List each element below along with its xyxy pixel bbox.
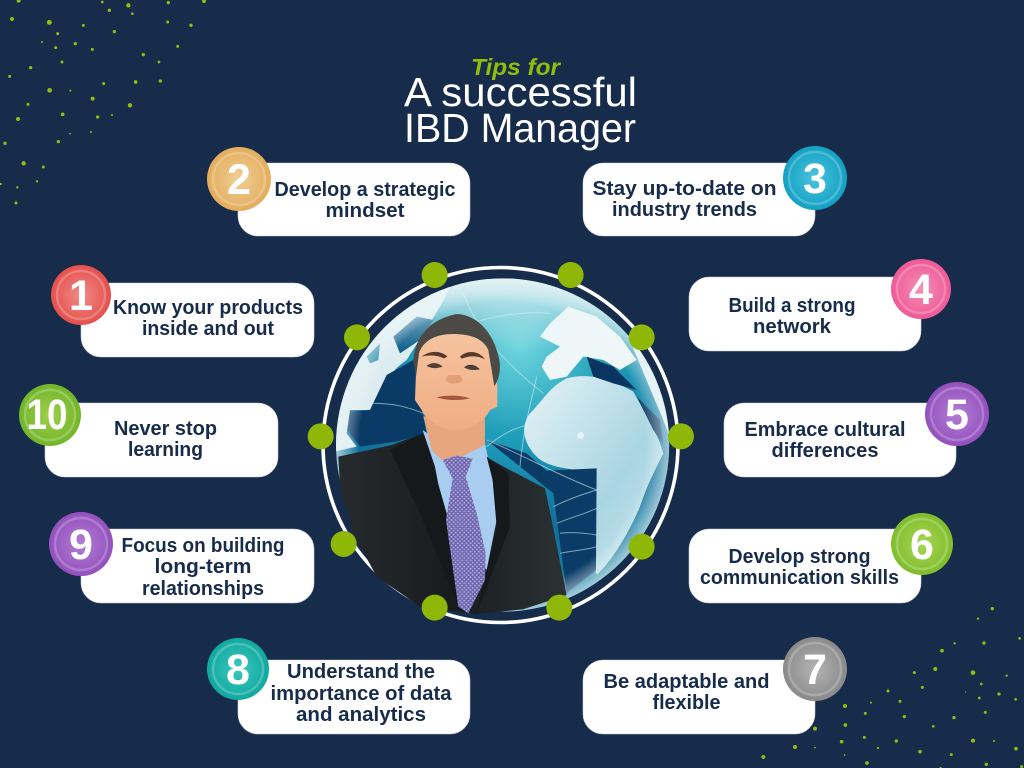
tip 4: 4 (909, 266, 933, 314)
outer ring (323, 268, 678, 622)
tip 5: Embrace cultural (744, 418, 906, 441)
tip 7: 7 (803, 646, 827, 694)
tip 6 (689, 513, 953, 603)
tip 9: 9 (69, 521, 93, 569)
tip 4: Build a strong (728, 294, 856, 317)
tip 1: 1 (69, 272, 93, 320)
title line 1: A successful (404, 69, 637, 115)
title line 2: IBD Manager (404, 105, 636, 151)
tip 8: importance of data (270, 682, 452, 705)
brows (422, 352, 485, 359)
tip 2: mindset (326, 199, 405, 222)
tip 10: Never stop (114, 417, 217, 440)
tip 10: 10 (26, 391, 68, 439)
tip 7: Be adaptable and (604, 670, 770, 693)
tip 1: inside and out (142, 317, 274, 340)
suit (338, 433, 567, 614)
decorative dots: bottom right (761, 607, 1023, 768)
tip 4 (689, 259, 951, 351)
tip 9: long-term (154, 555, 252, 578)
tie (443, 456, 486, 613)
tip 6: communication skills (700, 566, 899, 589)
head (415, 331, 497, 430)
subtitle: Tips for: Tips for (471, 54, 561, 80)
man portrait (338, 314, 567, 614)
tip 3 (583, 146, 847, 236)
tip 7 (583, 637, 847, 734)
tip 8: 8 (226, 646, 250, 694)
tip 10 (19, 384, 278, 477)
green node dots (308, 262, 694, 621)
tip 8: and analytics (296, 703, 426, 726)
tip 8 (207, 638, 470, 734)
tip 4: network (753, 315, 832, 338)
tip 3: 3 (803, 155, 827, 203)
tip 7: flexible (652, 691, 720, 714)
lapels (390, 433, 510, 613)
tip 9: relationships (142, 577, 264, 600)
tip 3: Stay up-to-date on (592, 177, 776, 200)
tip 2: Develop a strategic (274, 178, 456, 201)
tip 6: Develop strong (728, 545, 870, 568)
tip 1 (51, 265, 314, 357)
nose and mouth (445, 375, 463, 384)
tip 8: Understand the (287, 660, 435, 683)
tip 3: industry trends (612, 198, 757, 221)
hair (413, 314, 500, 386)
tip 2: 2 (227, 156, 251, 204)
tip 6: 6 (910, 521, 934, 569)
neck (423, 410, 485, 460)
decorative dots: top left (0, 0, 206, 204)
tip 10: learning (128, 438, 203, 461)
tip 9 (49, 512, 314, 603)
globe (327, 267, 673, 612)
shirt (423, 430, 497, 570)
tip 1: Know your products (113, 296, 303, 319)
tip 2 (207, 147, 470, 236)
tip 9: Focus on building (122, 534, 284, 557)
tip 5: differences (772, 439, 878, 462)
tip 5: 5 (945, 391, 969, 439)
tip 5 (724, 382, 989, 477)
title (404, 54, 637, 151)
eyes (427, 363, 480, 370)
central globe portrait (308, 262, 694, 622)
